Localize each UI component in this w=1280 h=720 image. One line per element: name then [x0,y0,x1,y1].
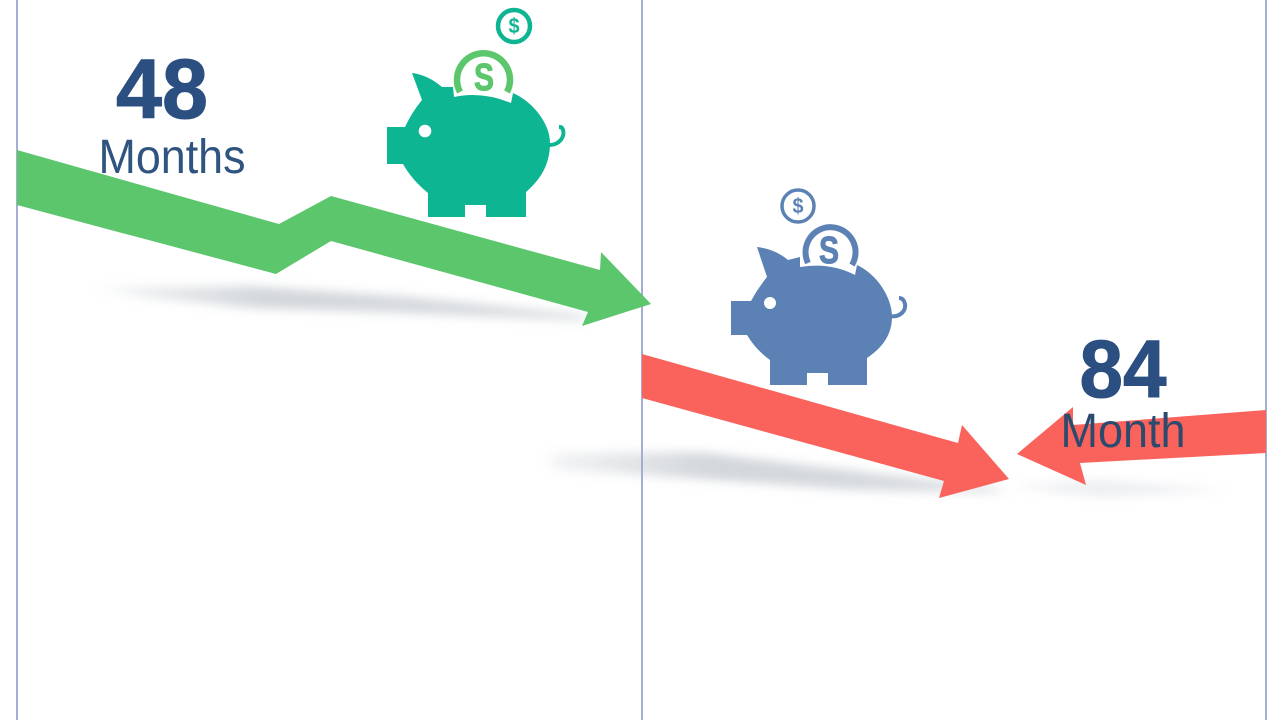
label: 48 Months [98,42,246,184]
small coin symbol: $ [792,195,804,218]
coin in slot [806,227,856,265]
label: 48 Months: 48 [116,42,208,136]
icon: green piggy bank [387,10,563,217]
pig body [731,247,892,385]
pig eye [764,297,776,309]
shadow: right arrows [552,452,1225,497]
label: 84 Month: 84 [1080,324,1167,415]
pig body [387,73,550,217]
coin dollar sign: S [819,230,839,272]
coin dollar sign: S [474,57,494,99]
small coin [782,190,814,222]
label: 84 Month [1060,324,1186,458]
red arrow: left [642,354,1009,498]
icon: blue piggy bank [731,190,905,385]
coin in slot [457,53,510,92]
label: 84 Month: Month [1060,405,1186,458]
pig eye [419,125,431,137]
pig tail [889,298,905,316]
small coin symbol: $ [508,15,520,38]
red arrow: right [1017,407,1266,485]
pig tail [547,127,563,145]
shadow: left arrow [95,286,585,321]
label: 48 Months: Months [98,131,246,184]
green arrow [17,150,651,326]
small coin [498,10,530,42]
